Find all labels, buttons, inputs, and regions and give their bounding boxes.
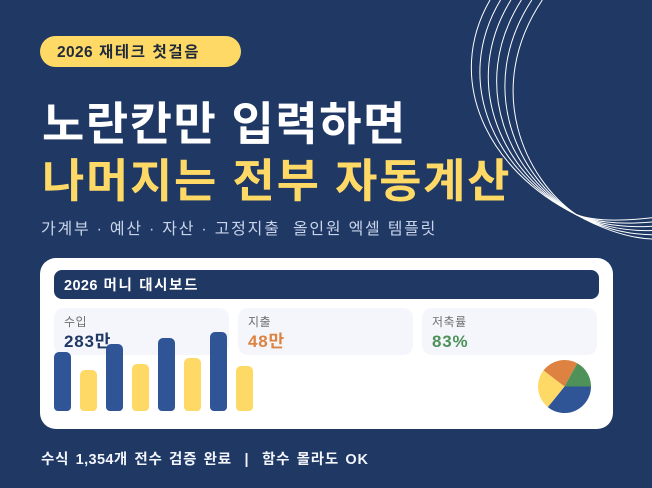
title line 1: 노란칸만 입력하면 (42, 98, 407, 150)
badge: 2026 재테크 첫걸음 (40, 36, 241, 67)
badge: 2026 재테크 첫걸음: 2026 재테크 첫걸음 (57, 44, 200, 61)
bar chart (54, 332, 253, 411)
stat: 저축률 (422, 308, 597, 355)
stat: 지출: 지출 (248, 315, 271, 329)
stat: 수입 (54, 308, 229, 355)
panel: dashboard card (40, 258, 613, 429)
stat: 수입: 283만 (64, 332, 111, 351)
stat: 저축률: 저축률 (432, 315, 467, 329)
stat: 지출 (238, 308, 413, 355)
stat: 지출: 48만 (248, 332, 285, 351)
footer text: 수식 1,354개 전수 검증 완료 | 함수 몰라도 OK (41, 452, 369, 468)
subtitle: 가계부 · 예산 · 자산 · 고정지출 올인원 엑셀 템플릿 (41, 221, 437, 238)
pie chart (538, 360, 591, 413)
title line 2: 나머지는 전부 자동계산 (42, 155, 511, 207)
stat: 저축률: 83% (432, 332, 468, 351)
dashboard header: 2026 머니 대시보드 (64, 278, 199, 294)
stat: 수입: 수입 (64, 315, 87, 329)
dashboard header (54, 270, 599, 299)
